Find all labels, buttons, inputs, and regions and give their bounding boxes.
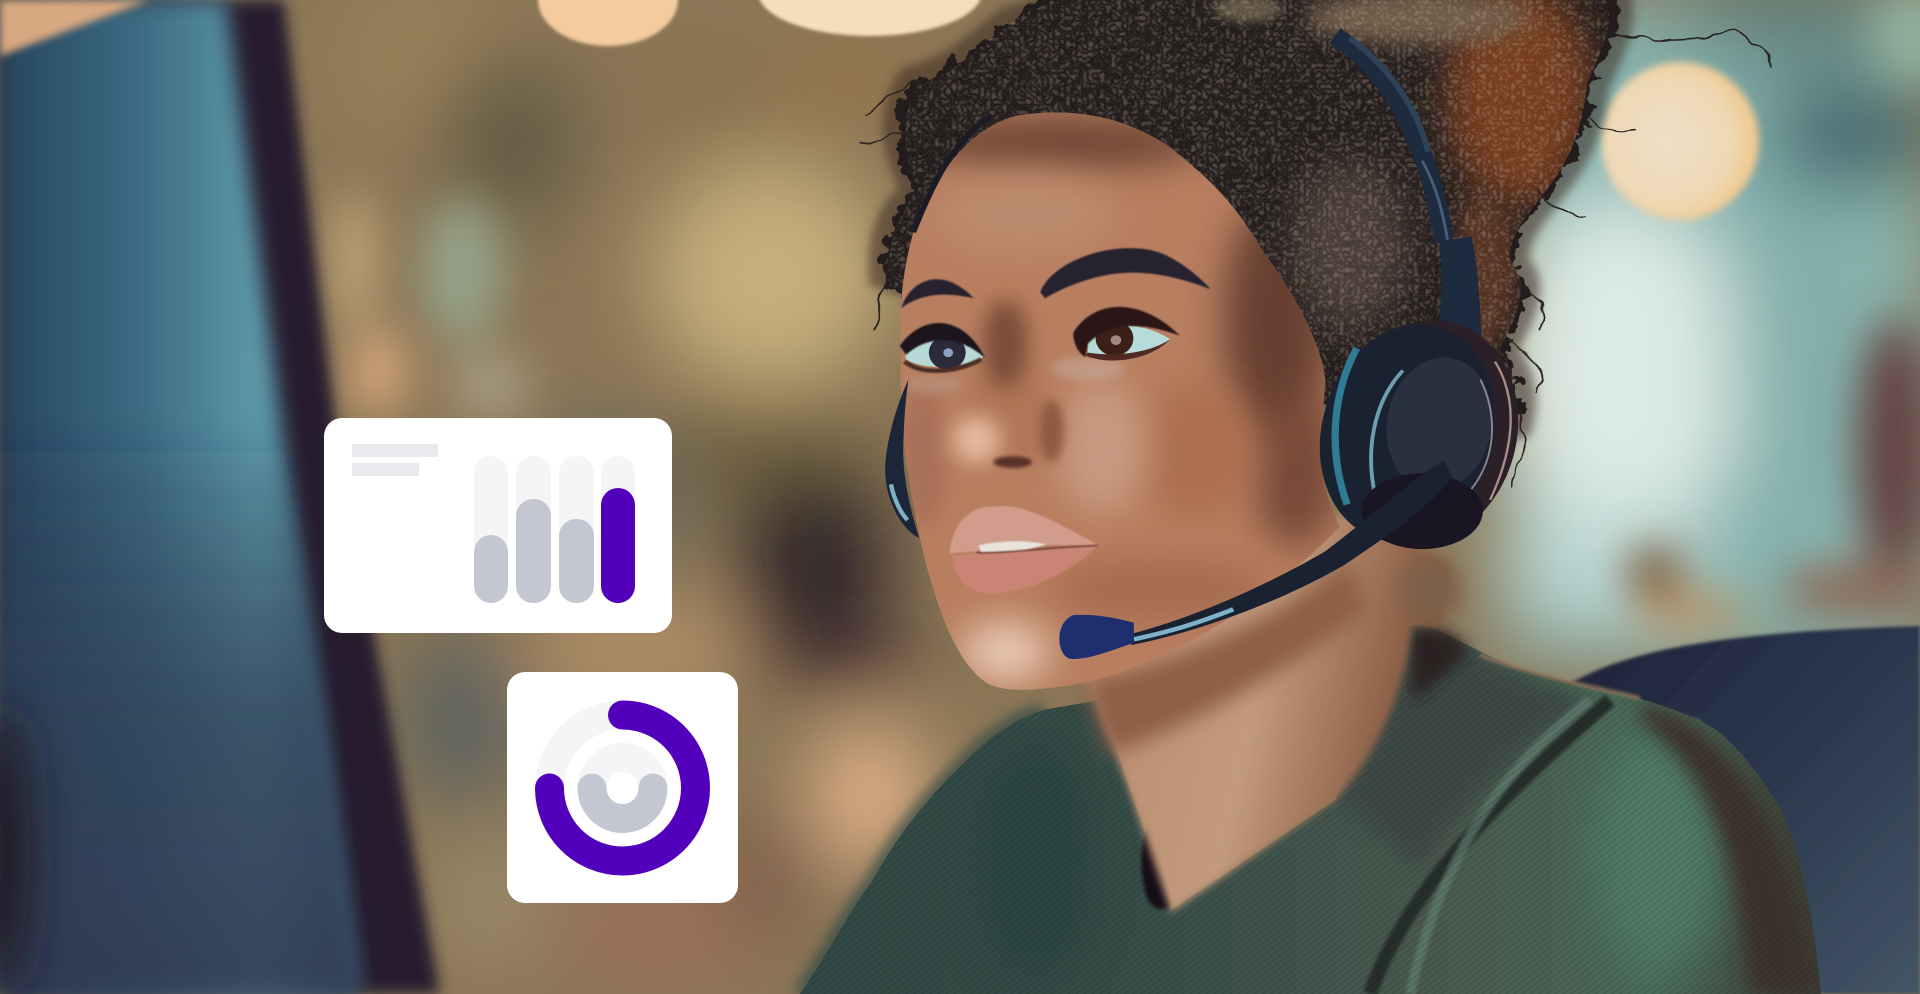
stray curls [860,27,1771,487]
right eye [1073,307,1180,361]
donut rings [550,715,696,861]
lips [950,506,1098,594]
neck [1085,510,1462,912]
right eyebrow [1040,248,1211,298]
stat card: donut chart [507,672,738,903]
microphone head [1059,615,1134,659]
nose [988,392,1042,456]
card heading placeholders [352,444,438,476]
collar back edge [1410,625,1470,700]
under-eye highlight [1051,357,1124,380]
headset band [1335,36,1444,241]
blurred computer monitor [0,0,440,994]
bokeh lights [538,0,1759,220]
left eye [900,323,985,371]
left eyebrow [901,279,974,308]
far side ear piece [885,379,919,538]
headset slider block [1427,237,1483,384]
hair [860,0,1771,487]
far side band [913,116,991,232]
stat card: bar chart [324,418,672,633]
shoulder rim light [1480,655,1640,698]
sweater [780,600,1840,994]
collar shadow [1142,825,1172,909]
headset [885,36,1540,659]
woman's head (photo painted in a local coordinate frame) [860,0,1771,696]
microphone boom [1131,460,1452,645]
face [889,98,1354,696]
bars [474,456,635,603]
office chair [1560,626,1920,994]
right side teal wall [1495,0,1920,660]
ear cup [1299,304,1540,562]
